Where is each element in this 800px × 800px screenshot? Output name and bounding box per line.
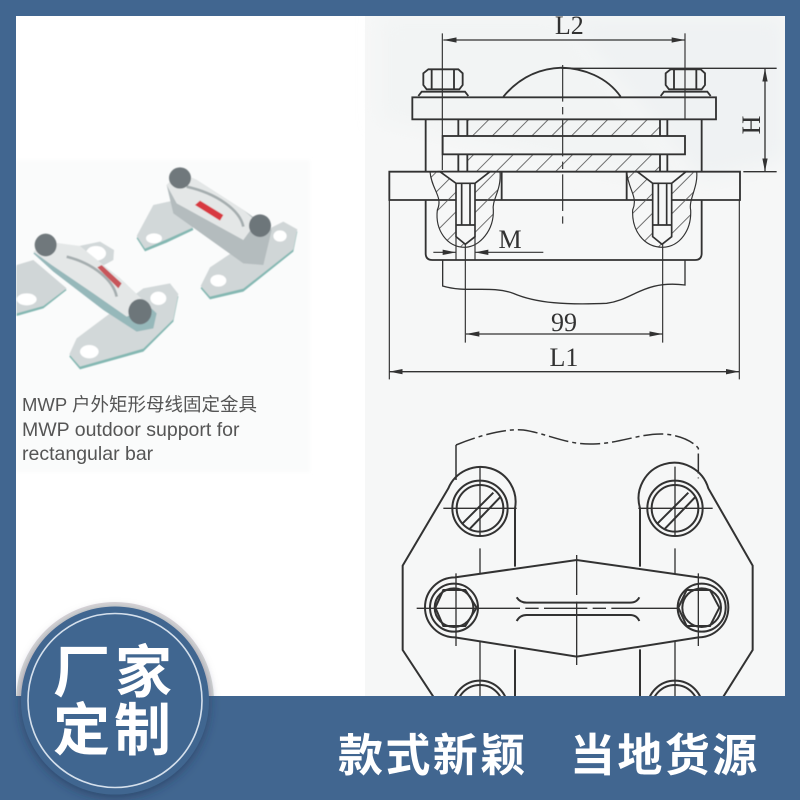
dimension: M: M <box>498 225 522 254</box>
bolt heads <box>418 69 711 96</box>
dimension: H: H <box>737 116 766 134</box>
centre line <box>561 65 564 227</box>
top-view technical drawing <box>403 430 753 736</box>
side-view technical drawing <box>389 11 777 379</box>
weld sections <box>430 172 697 247</box>
broken-off body <box>443 260 685 304</box>
right hex bolt <box>678 573 726 646</box>
slogan left: 款式新颖 <box>338 730 528 781</box>
panel: product photo <box>16 160 310 472</box>
clamp plate <box>425 560 728 657</box>
badge text: 定 <box>53 699 110 763</box>
upper left bolt <box>443 467 517 697</box>
dimension: L1: L1 <box>550 343 578 372</box>
product caption <box>22 394 257 465</box>
top plate <box>412 97 716 119</box>
badge text <box>53 641 172 763</box>
hatched bars <box>467 119 660 172</box>
dimension: M <box>433 225 543 260</box>
badge text: 家 <box>115 641 172 705</box>
top band <box>0 0 800 16</box>
dimension: L1 <box>389 200 739 379</box>
lower bolts <box>452 681 703 736</box>
drawing background <box>365 16 785 696</box>
front clamp <box>17 234 178 369</box>
base plate outline <box>403 463 753 697</box>
dimension: L2: L2 <box>555 11 584 40</box>
middle plate <box>443 136 685 154</box>
back clamp <box>137 167 297 299</box>
product caption: rectangular bar <box>22 443 154 465</box>
left hex bolt <box>430 573 478 646</box>
badge <box>21 606 209 794</box>
badge text: 制 <box>114 699 171 763</box>
lower block <box>426 200 702 260</box>
centre lines <box>417 606 733 610</box>
dome <box>503 68 621 97</box>
badge halo <box>16 602 214 696</box>
dimension: 99 <box>465 243 663 343</box>
dashed bar outline <box>456 430 698 478</box>
right band <box>785 0 800 800</box>
bolt shanks <box>426 119 702 172</box>
upper right bolt <box>638 467 713 697</box>
product caption: MWP outdoor support for <box>22 419 240 441</box>
slogan right: 当地货源 <box>570 730 760 781</box>
left band <box>0 0 16 800</box>
centre slot <box>517 597 639 621</box>
badge text: 厂 <box>53 641 110 705</box>
base bar <box>389 172 740 200</box>
bottom band <box>0 696 800 800</box>
product caption: MWP 户外矩形母线固定金具 <box>22 394 257 415</box>
dimension: 99: 99 <box>551 308 577 337</box>
